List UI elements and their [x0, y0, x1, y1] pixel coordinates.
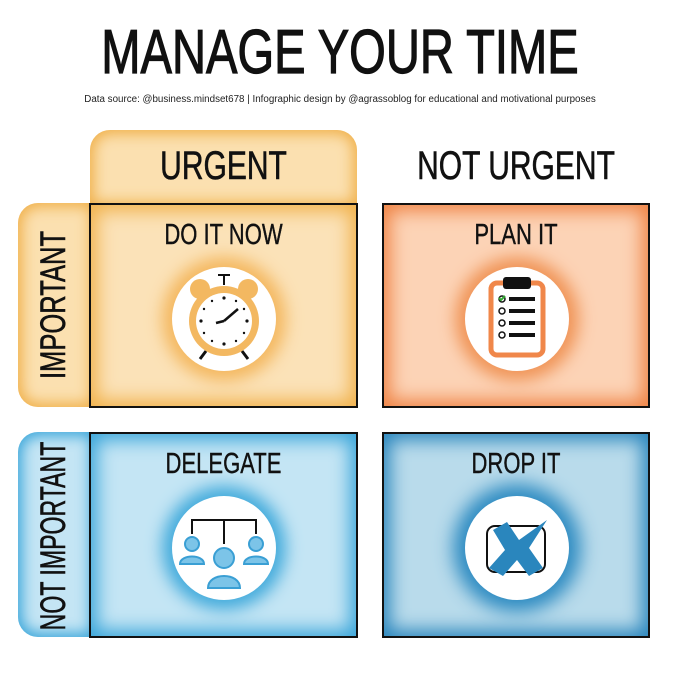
- side tab: not important: [18, 432, 94, 637]
- panel: delegate: DELEGATE: [166, 448, 281, 480]
- icon: crossed box: [465, 496, 569, 600]
- panel: drop it: DROP IT: [472, 448, 560, 480]
- icon: people: [172, 496, 276, 600]
- icon: alarm clock: [172, 267, 276, 371]
- side tab: important: [18, 203, 94, 407]
- panel: plan it: PLAN IT: [474, 219, 558, 251]
- panel: delegate: [89, 432, 358, 638]
- panel: drop it: [382, 432, 650, 638]
- header tab: urgent: [90, 130, 357, 206]
- side tab: not important: NOT IMPORTANT: [34, 442, 73, 630]
- header: not urgent: NOT URGENT: [417, 144, 615, 188]
- panel: plan it: [382, 203, 650, 408]
- subtitle: Data source: @business.mindset678 | Infographic design by @agrassoblog for educational and motivational purposes: [84, 94, 596, 105]
- panel: do it now: [89, 203, 358, 408]
- panel: do it now: DO IT NOW: [164, 219, 283, 251]
- header tab: urgent: URGENT: [160, 144, 287, 188]
- icon: clipboard: [465, 267, 569, 371]
- side tab: important: IMPORTANT: [34, 231, 73, 379]
- title: MANAGE YOUR TIME: [101, 18, 579, 87]
